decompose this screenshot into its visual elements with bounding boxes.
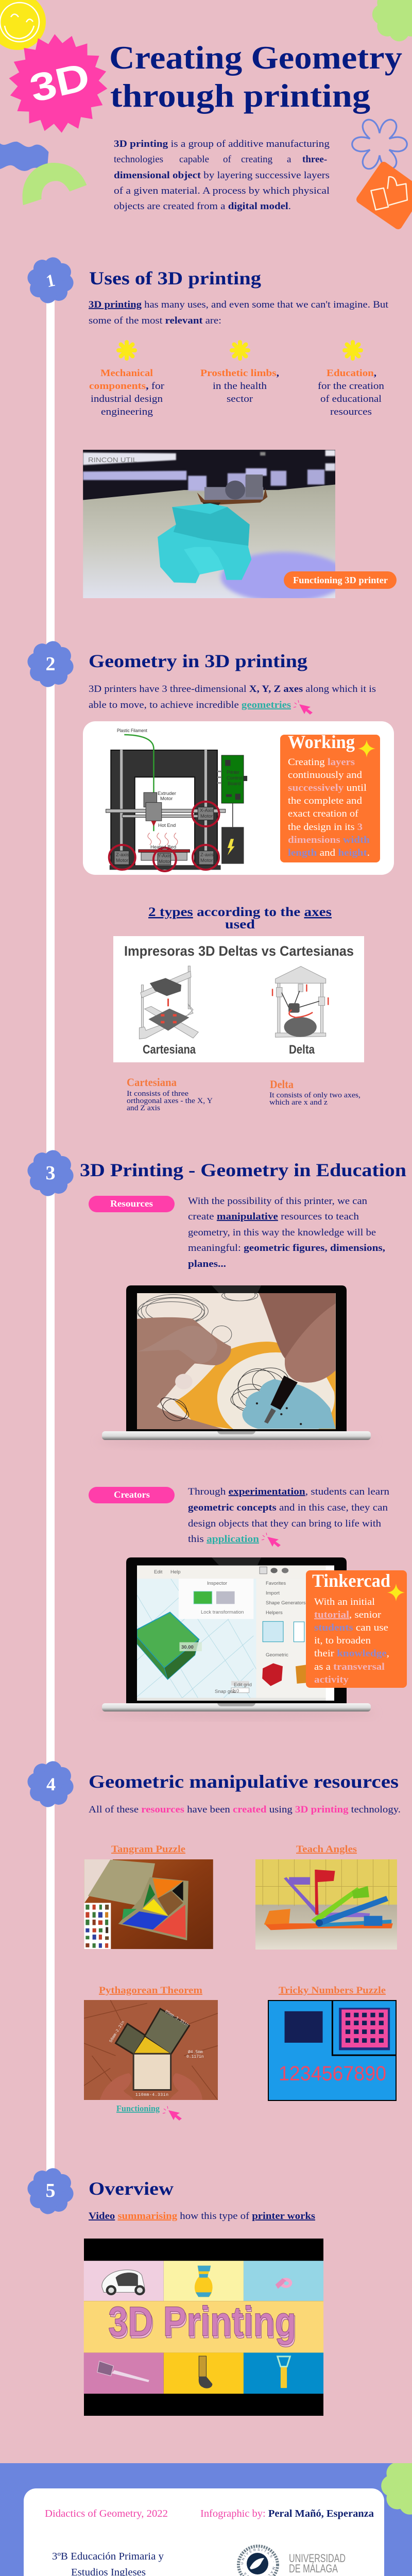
panel: printer diagram and working — [83, 721, 394, 875]
callout: working: length and height . — [288, 848, 370, 858]
section 1 badge: 1 — [44, 271, 57, 291]
photo: spirograph — [137, 1293, 336, 1429]
photo: pythagorean: 56mm-2.2in — [109, 2020, 126, 2044]
use: mechanical components: engineering — [101, 406, 153, 417]
section 5 text: Video summarising how this type of printer works — [89, 2211, 315, 2222]
callout: tinkercad: their knowledge , — [314, 1648, 389, 1659]
intro paragraph: dimensional object by layering successive layers — [114, 170, 330, 181]
type: cartesiana — [127, 1076, 213, 1112]
use: mechanical components: components , for — [89, 381, 165, 392]
type: delta: Delta — [270, 1078, 294, 1091]
resource: tangram puzzle: Tangram Puzzle — [111, 1844, 185, 1855]
panel: credits: Infographic by: Peral Mañó, Esperanza — [200, 2508, 374, 2519]
screenshot: tinkercad: Favorites — [266, 1581, 286, 1586]
printer diagram: Hot End — [158, 823, 176, 828]
callout: working: the design in its 3 — [288, 822, 363, 833]
section 3 badge: 3 — [45, 1162, 56, 1184]
photo: pythagorean: 0.117in — [186, 2055, 204, 2059]
image: deltas vs cartesianas: Delta — [289, 1043, 315, 1057]
title: through printing — [110, 77, 370, 114]
printer diagram: Y-Axis — [158, 853, 171, 859]
diagram: cartesian printer — [139, 966, 198, 1039]
section 5 heading: Overview — [89, 2178, 174, 2199]
intro paragraph: technologies — [114, 154, 163, 165]
use: prosthetic limbs — [200, 342, 279, 404]
printer diagram: Motor — [159, 859, 171, 865]
shape: blue wave — [0, 142, 48, 174]
photo: tricky numbers: 1234567890 — [279, 2062, 386, 2085]
image: deltas vs cartesianas: Impresoras 3D Deltas vs Cartesianas — [124, 943, 354, 959]
section 2 text: 3D printers have 3 three-dimensional X, Y, Z axes along which it is — [89, 684, 376, 694]
pill: creators — [89, 1487, 175, 1503]
subheading: 2 types — [148, 905, 332, 931]
section 2 text: able to move, to achieve incredible geometries — [89, 700, 291, 710]
section 5 badge — [24, 2164, 77, 2218]
resources text: create manipulative resources to teach — [188, 1211, 359, 1222]
resources text: geometry, in this way the knowledge will be — [188, 1227, 376, 1238]
intro paragraph: 3D printing is a group of additive manufacturing — [114, 139, 330, 149]
use: education: for the creation — [318, 381, 385, 392]
type: cartesiana: and Z axis — [127, 1104, 160, 1112]
footer band — [0, 2463, 412, 2576]
label pill: functioning 3D printer: Functioning 3D printer — [293, 575, 388, 585]
section 1 text: some of the most relevant are: — [89, 315, 221, 326]
section 4 heading: Geometric manipulative resources — [89, 1771, 399, 1792]
screenshot: tinkercad: Helpers — [266, 1610, 283, 1616]
resource: tangram puzzle — [84, 1844, 213, 1949]
use: education: of educational — [320, 394, 382, 404]
section 1 text: 3D printing has many uses, and even some that we can't imagine. But — [89, 299, 389, 310]
printer diagram: Motor — [200, 858, 213, 863]
logo: universidad de malaga: DE MÁLAGA — [289, 2562, 338, 2575]
panel: credits: Didactics of Geometry, 2022 — [45, 2508, 168, 2519]
photo: pythagorean: Ø4.5mm — [188, 2050, 203, 2055]
resources text: planes... — [188, 1259, 226, 1269]
printer diagram: Control — [227, 775, 243, 781]
resource: teach angles: Teach Angles — [296, 1844, 357, 1855]
resources text: With the possibility of this printer, we can — [188, 1196, 368, 1207]
intro paragraph: of a given material. A process by which physical — [114, 185, 330, 196]
photo: functioning 3D printer: RINCON UTIL — [88, 456, 137, 464]
printer diagram: Motor — [160, 796, 173, 802]
icon: car — [102, 2270, 145, 2295]
type: delta — [269, 1078, 360, 1107]
header decorations — [0, 0, 412, 225]
intro paragraph — [114, 139, 330, 212]
shape: green blob — [381, 2463, 412, 2515]
screenshot: tinkercad: 1.0 — [232, 1688, 239, 1694]
label pill: functioning 3D printer — [284, 571, 397, 589]
photo: tricky numbers — [268, 2001, 396, 2100]
pill: resources: Resources — [110, 1198, 153, 1209]
creators text — [188, 1486, 390, 1545]
printer diagram — [106, 728, 247, 871]
section 5 badge: 5 — [45, 2180, 56, 2201]
pill: resources — [89, 1196, 175, 1212]
use: mechanical components — [89, 342, 165, 417]
lettering: 3D Printing: 3D Printing — [108, 2298, 296, 2345]
creators text: Through experimentation , students can learn — [188, 1486, 390, 1497]
photo: functioning 3D printer — [83, 450, 347, 602]
icon: smiley sun — [0, 0, 46, 50]
icon: bottle opener — [278, 2357, 290, 2388]
callout: tinkercad: With an initial — [314, 1597, 375, 1607]
creators text: design objects that they can bring to life with — [188, 1518, 382, 1529]
shape: green arc — [23, 163, 87, 205]
section 4 badge — [24, 1757, 77, 1811]
resource: tricky numbers puzzle: Tricky Numbers Puzzle — [279, 1985, 386, 1996]
resource: pythagorean theorem — [84, 1985, 218, 2113]
type: delta: which are x and z — [269, 1098, 328, 1107]
printer diagram: Z-axis — [116, 852, 129, 858]
resources text: meaningful: geometric figures, dimensions, — [188, 1243, 385, 1253]
screenshot: tinkercad: Inspector — [207, 1581, 227, 1586]
use: mechanical components: industrial design — [91, 394, 163, 404]
icon: cursor — [294, 700, 313, 715]
resource: tricky numbers puzzle — [268, 1985, 396, 2100]
callout: tinkercad — [306, 1570, 407, 1688]
screenshot: tinkercad: 30.00 — [181, 1645, 194, 1650]
intro paragraph: of — [223, 154, 232, 165]
callout: working: continuously and — [288, 770, 363, 781]
section 4 text: All of these resources have been created using 3D printing technology. — [89, 1804, 401, 1815]
callout: working: the complete and — [288, 795, 363, 806]
screenshot: tinkercad — [137, 1566, 334, 1701]
icon: whistle — [276, 2278, 292, 2289]
type: cartesiana: orthogonal axes - the X, Y — [127, 1097, 213, 1105]
section 1 badge — [24, 253, 77, 307]
panel: credits — [24, 2488, 384, 2576]
callout: working: dimensions width — [288, 835, 370, 845]
creators text: geometric concepts and in this case, they can — [188, 1502, 388, 1513]
icon: sock — [199, 2356, 212, 2388]
callout: working: Working — [288, 732, 355, 752]
screenshot: tinkercad: Import — [266, 1590, 280, 1596]
photo: pythagorean — [84, 2000, 218, 2100]
creators text: this application — [188, 1534, 259, 1545]
printer diagram: Motor — [200, 814, 213, 819]
screenshot: tinkercad: Help — [170, 1569, 181, 1575]
screenshot: tinkercad: Lock transformation — [201, 1609, 244, 1615]
section 3 heading: 3D Printing - Geometry in Education — [80, 1160, 406, 1180]
printer diagram: Plastic Filament — [117, 728, 147, 734]
laptop: tinkercad screen — [97, 1557, 375, 1720]
screenshot: tinkercad: Snap grid — [215, 1689, 236, 1694]
section 2 badge — [24, 637, 77, 691]
callout: tinkercad: as a transversal — [314, 1662, 385, 1672]
icon: vase — [195, 2266, 213, 2297]
printer diagram: Z-axis — [200, 852, 214, 858]
section 1 heading: Uses of 3D printing — [89, 268, 261, 289]
printer diagram: Board — [228, 781, 241, 787]
printer diagram: Motor — [116, 858, 128, 863]
intro paragraph: a — [287, 154, 291, 165]
image: deltas vs cartesianas: Cartesiana — [143, 1043, 196, 1057]
icon: cursor — [262, 1533, 281, 1547]
shape: blue outline flower — [345, 108, 412, 180]
icon: cursor — [163, 2106, 182, 2121]
photo: pythagorean: 85mm-3.35in — [164, 2009, 190, 2028]
section 2 heading: Geometry in 3D printing — [89, 651, 307, 671]
type: cartesiana: Cartesiana — [127, 1076, 177, 1089]
resource: teach angles — [255, 1844, 397, 1950]
badge: pink 3D starburst: 3D — [26, 55, 94, 111]
section 1 text — [89, 299, 389, 326]
screenshot: tinkercad: Shape Generators — [266, 1600, 306, 1606]
intro paragraph: capable — [179, 154, 209, 165]
use: education: resources — [330, 406, 372, 417]
intro paragraph: three- — [302, 154, 327, 165]
pill: creators: Creators — [114, 1489, 150, 1500]
subheading: 2 types: 2 types according to the axes — [148, 905, 332, 919]
section 2 text — [89, 684, 376, 710]
subheading: 2 types: used — [225, 918, 255, 931]
use: mechanical components: Mechanical — [100, 368, 153, 379]
image: deltas vs cartesianas — [113, 936, 364, 1062]
use: prosthetic limbs: Prosthetic limbs , — [200, 368, 279, 379]
lettering: 3D Printing: 3D Printing — [109, 2300, 297, 2347]
use: education — [318, 342, 385, 417]
use: prosthetic limbs: sector — [227, 394, 253, 404]
shape: green blob — [372, 0, 412, 41]
title — [109, 39, 402, 114]
resources text — [188, 1196, 385, 1269]
intro paragraph: objects are created from a digital model . — [114, 201, 291, 212]
printer diagram: X-Axis — [200, 808, 214, 814]
printer diagram: Extruder — [158, 791, 176, 796]
photo: pythagorean: 110mm-4.33in — [135, 2093, 168, 2097]
screenshot: tinkercad: Edit — [154, 1569, 163, 1575]
photo: tangram — [84, 1859, 213, 1949]
link: functioning: Functioning — [116, 2104, 160, 2113]
video still: 3D printing — [84, 2239, 323, 2416]
callout: working: Creating layers — [288, 757, 355, 768]
use: prosthetic limbs: in the health — [213, 381, 267, 392]
timeline line — [46, 289, 55, 2184]
icon: fly swatter — [97, 2361, 149, 2382]
diagram: delta printer — [272, 967, 328, 1037]
use: education: Education , — [327, 368, 376, 379]
badge: pink 3D starburst — [4, 30, 112, 137]
callout: working — [280, 732, 380, 862]
resource: pythagorean theorem: Pythagorean Theorem — [99, 1985, 202, 1996]
laptop: spirograph video — [97, 1285, 375, 1449]
callout: tinkercad: activity — [314, 1674, 349, 1685]
logo: universidad de malaga: UNIVERSIDAD — [289, 2552, 346, 2565]
logo: universidad de malaga — [237, 2545, 346, 2576]
panel: credits: 3ºB Educación Primaria y — [52, 2551, 164, 2562]
printer diagram: Printer — [227, 770, 239, 775]
intro paragraph: creating — [241, 154, 273, 165]
icon: orange thumbs-up card — [360, 166, 412, 225]
title: Creating Geometry — [109, 39, 402, 76]
printer diagram: Heated Bed — [150, 844, 176, 850]
section 3 badge — [24, 1146, 77, 1200]
photo: angles — [255, 1859, 397, 1950]
callout: working: exact creation of — [288, 808, 359, 819]
screenshot: tinkercad: Edit grid — [234, 1682, 252, 1688]
callout: tinkercad: Tinkercad — [312, 1570, 390, 1591]
screenshot: tinkercad: Geometric — [266, 1652, 288, 1658]
callout: tinkercad: students can use — [314, 1622, 388, 1633]
section 2 badge: 2 — [45, 653, 56, 675]
callout: working: successively until — [288, 783, 367, 793]
callout: tinkercad: it, to broaden — [314, 1635, 371, 1646]
type: delta: It consists of only two axes, — [269, 1091, 360, 1099]
section 4 badge: 4 — [46, 1774, 56, 1794]
type: cartesiana: It consists of three — [127, 1090, 188, 1098]
callout: tinkercad: tutorial , senior — [314, 1609, 382, 1620]
